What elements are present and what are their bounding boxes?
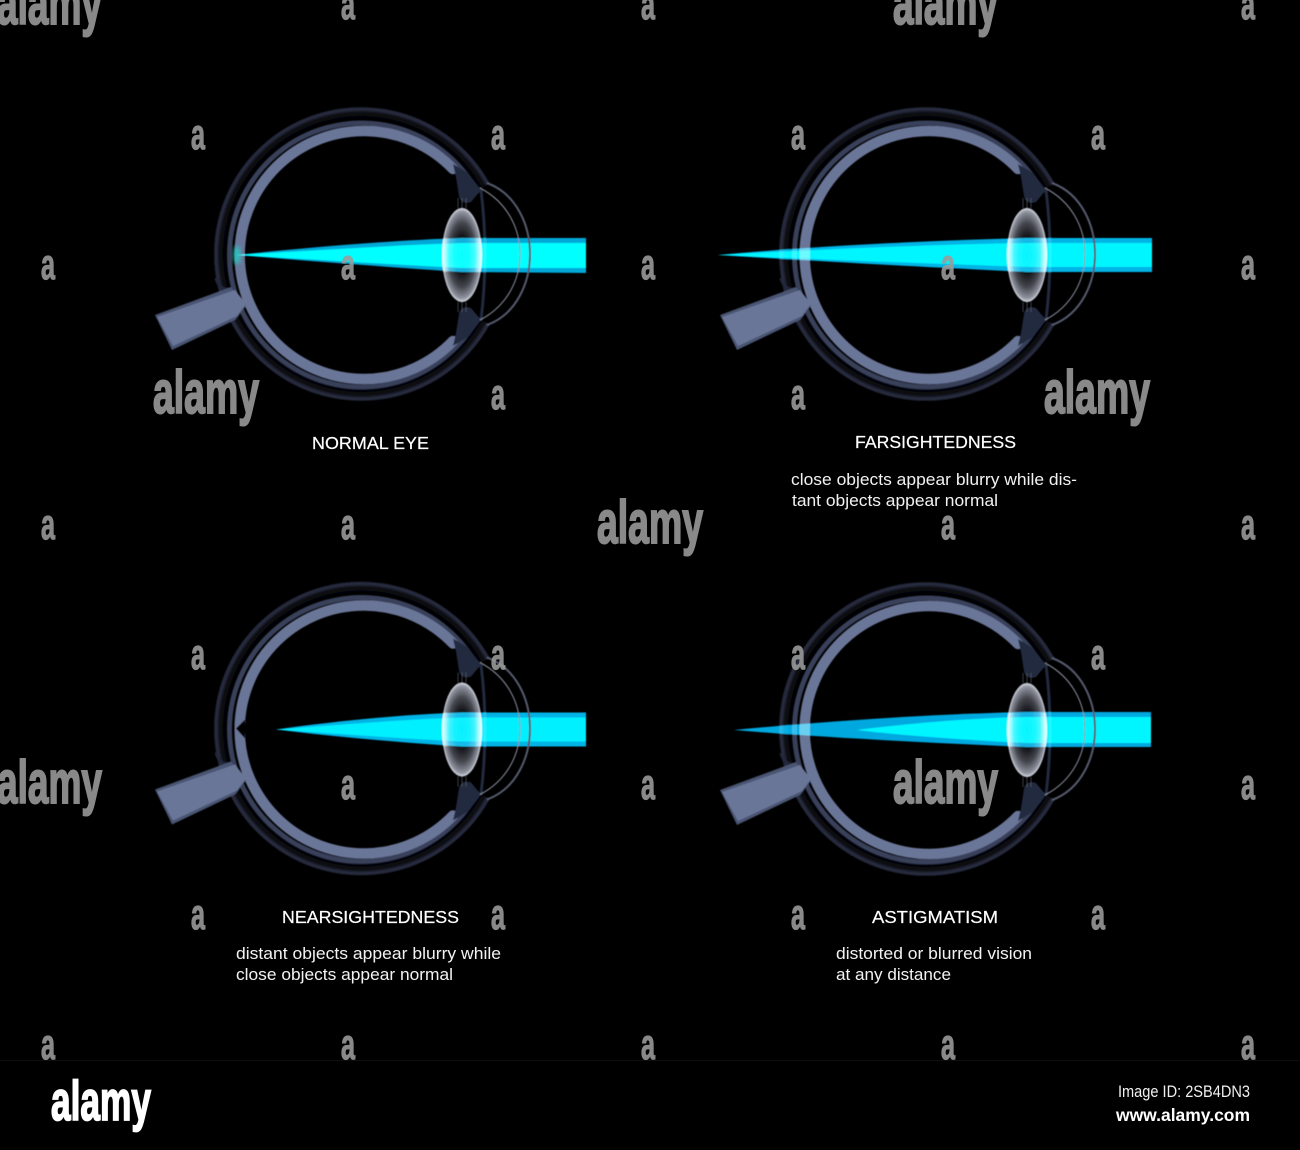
- lens: [442, 208, 482, 302]
- heading: farsightedness: FARSIGHTEDNESS: [855, 432, 1016, 452]
- watermark pattern: a: [1091, 891, 1106, 939]
- optic nerve: [155, 752, 246, 824]
- heading: astigmatism: ASTIGMATISM: [872, 907, 998, 927]
- watermark pattern: a: [791, 891, 806, 939]
- text: astigmatism description: distorted or blurred vision: [836, 944, 1032, 963]
- eye: normal eye: [155, 112, 586, 396]
- sclera: [219, 587, 485, 870]
- iris and ciliary body: [1018, 639, 1050, 821]
- image id: Image ID: 2SB4DN3: [1118, 1083, 1250, 1101]
- watermark pattern: a: [491, 371, 506, 419]
- eye: farsightedness: [718, 112, 1152, 396]
- watermark pattern: a: [41, 1021, 56, 1069]
- eye: astigmatism: [720, 588, 1151, 870]
- watermark pattern: a: [1091, 111, 1106, 159]
- text: farsightedness description: [791, 470, 1077, 510]
- sclera: [784, 588, 1050, 870]
- focal glow on retina: [233, 246, 241, 264]
- outer retina layer: [794, 123, 1043, 387]
- lens: [1007, 683, 1047, 777]
- watermark pattern: a: [941, 501, 956, 549]
- footer logo: alamy: [51, 1069, 151, 1132]
- light beam: [276, 712, 586, 746]
- watermark pattern: a: [41, 241, 56, 289]
- zonule fibres: [458, 198, 466, 312]
- watermark pattern: a: [491, 891, 506, 939]
- light beam: [718, 238, 1152, 272]
- retina: [240, 131, 453, 379]
- footer bar: [0, 1060, 1300, 1150]
- watermark pattern: a: [491, 111, 506, 159]
- cornea: [480, 658, 530, 800]
- watermark pattern: a: [1091, 631, 1106, 679]
- light beam: [236, 238, 586, 273]
- watermark pattern: a: [341, 761, 356, 809]
- optic nerve: [720, 278, 811, 350]
- sclera: [219, 112, 485, 396]
- website: www.alamy.com: [1115, 1105, 1250, 1125]
- watermark pattern: alamy: [893, 749, 998, 816]
- text: farsightedness description: close objects appear blurry while dis-: [791, 470, 1077, 489]
- watermark pattern: alamy: [0, 749, 102, 816]
- watermark pattern: a: [791, 371, 806, 419]
- watermark pattern: a: [791, 111, 806, 159]
- watermark pattern: a: [1241, 501, 1256, 549]
- retina: [240, 606, 453, 854]
- light beam: [734, 712, 1151, 747]
- iris and ciliary body: [1018, 164, 1050, 346]
- text: astigmatism description: at any distance: [836, 965, 951, 984]
- watermark pattern: a: [341, 241, 356, 289]
- lens: [1007, 208, 1047, 302]
- watermark pattern: a: [941, 241, 956, 289]
- heading: normal eye: NORMAL EYE: [312, 433, 429, 453]
- lens: [442, 682, 482, 776]
- text: farsightedness description: tant objects appear normal: [792, 491, 998, 510]
- retina: [805, 131, 1018, 379]
- watermark pattern: a: [341, 1021, 356, 1069]
- retina: [805, 606, 1018, 854]
- watermark pattern: a: [791, 631, 806, 679]
- watermark pattern: a: [1241, 761, 1256, 809]
- watermark pattern: alamy: [597, 489, 703, 556]
- watermark pattern: a: [491, 631, 506, 679]
- outer retina layer: [794, 598, 1043, 862]
- text: nearsightedness description: [236, 944, 501, 984]
- heading: nearsightedness: NEARSIGHTEDNESS: [282, 907, 459, 927]
- watermark pattern: alamy: [153, 359, 259, 426]
- optic nerve: [155, 278, 246, 350]
- cornea: [1045, 658, 1095, 800]
- lens highlight: [1006, 238, 1048, 272]
- text: nearsightedness description: distant objects appear blurry while: [236, 944, 501, 963]
- optic nerve: [720, 753, 811, 825]
- zonule fibres: [1023, 198, 1031, 312]
- outer retina layer: [229, 123, 478, 387]
- watermark pattern: a: [641, 1021, 656, 1069]
- eye: nearsightedness: [155, 587, 586, 870]
- outer retina layer: [229, 598, 478, 862]
- watermark pattern: a: [341, 501, 356, 549]
- watermark pattern: a: [191, 891, 206, 939]
- zonule fibres: [458, 672, 466, 786]
- watermark pattern: a: [191, 631, 206, 679]
- retinal notch: [236, 720, 245, 738]
- iris and ciliary body: [453, 164, 485, 346]
- text: astigmatism description: [836, 944, 1032, 984]
- watermark pattern: a: [191, 111, 206, 159]
- lens highlight: [441, 712, 483, 747]
- watermark pattern: alamy: [1044, 359, 1150, 426]
- watermark pattern: a: [1241, 241, 1256, 289]
- watermark pattern: a: [941, 1021, 956, 1069]
- lens highlight: [441, 238, 483, 272]
- cornea: [480, 183, 530, 325]
- sclera: [784, 112, 1050, 396]
- lens highlight: [1006, 712, 1048, 748]
- text: nearsightedness description: close objects appear normal: [236, 965, 453, 984]
- watermark pattern: a: [41, 501, 56, 549]
- watermark pattern: a: [1241, 1021, 1256, 1069]
- iris and ciliary body: [453, 638, 485, 820]
- zonule fibres: [1023, 673, 1031, 787]
- watermark pattern: a: [641, 761, 656, 809]
- watermark pattern: a: [641, 241, 656, 289]
- cornea: [1045, 183, 1095, 325]
